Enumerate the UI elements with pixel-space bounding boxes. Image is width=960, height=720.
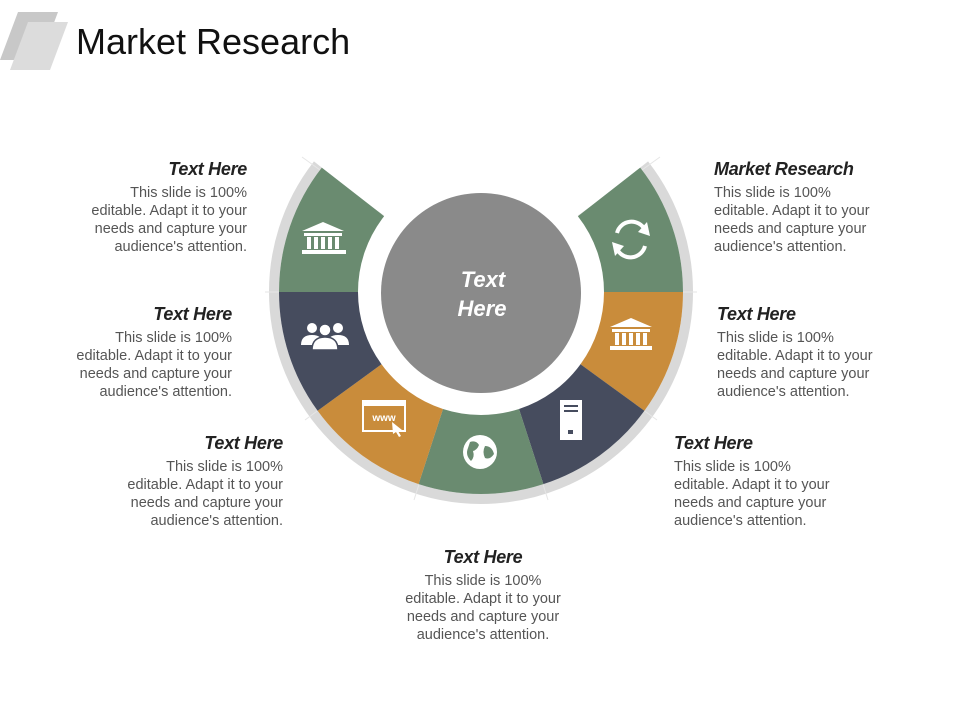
segment: top right green — [578, 168, 683, 292]
center circle: Here — [458, 296, 506, 321]
icon: www browser — [363, 401, 405, 437]
text: top left: This slide is 100% editable. Adapt it to your needs and capture your audience's attention. — [91, 185, 247, 255]
text: top left: Text Here — [168, 159, 247, 179]
segment: right orange — [580, 292, 683, 411]
segment: left dark — [279, 292, 382, 411]
outer ring — [274, 164, 688, 499]
title icon — [0, 12, 68, 70]
text: top right: Market Research — [714, 159, 854, 179]
icon: computer tower — [560, 400, 582, 440]
text: bottom right: Text Here — [674, 433, 753, 453]
center circle — [381, 193, 581, 393]
title: Market Research — [76, 21, 350, 62]
text: bottom: Text Here — [444, 547, 522, 567]
text: bottom left: This slide is 100% editable. Adapt it to your needs and capture your audience's attention. — [127, 459, 283, 529]
icon: bank right — [610, 318, 652, 350]
text: bottom: This slide is 100% editable. Adapt it to your needs and capture your audience's attention. — [405, 573, 561, 643]
segment: bottom left orange — [318, 364, 443, 484]
text: mid left: Text Here — [153, 304, 232, 324]
segment: top left green — [279, 168, 384, 292]
icon: bank left — [302, 222, 346, 254]
text: mid left: This slide is 100% editable. Adapt it to your needs and capture your audience's attention. — [76, 330, 232, 400]
text: top right: This slide is 100% editable. Adapt it to your needs and capture your audience's attention. — [714, 185, 870, 255]
text: mid right: Text Here — [717, 304, 796, 324]
text: bottom left: Text Here — [204, 433, 283, 453]
text: mid right: This slide is 100% editable. Adapt it to your needs and capture your audience's attention. — [717, 330, 873, 400]
icon: refresh — [612, 222, 650, 257]
center circle: Text — [461, 267, 507, 292]
segment: bottom right dark — [519, 364, 644, 484]
icon: people — [301, 323, 349, 350]
segment: bottom green — [419, 409, 543, 494]
icon: globe — [463, 435, 497, 469]
icon: www browser: www — [371, 413, 396, 424]
text: bottom right: This slide is 100% editable. Adapt it to your needs and capture your audience's attention. — [674, 459, 830, 529]
